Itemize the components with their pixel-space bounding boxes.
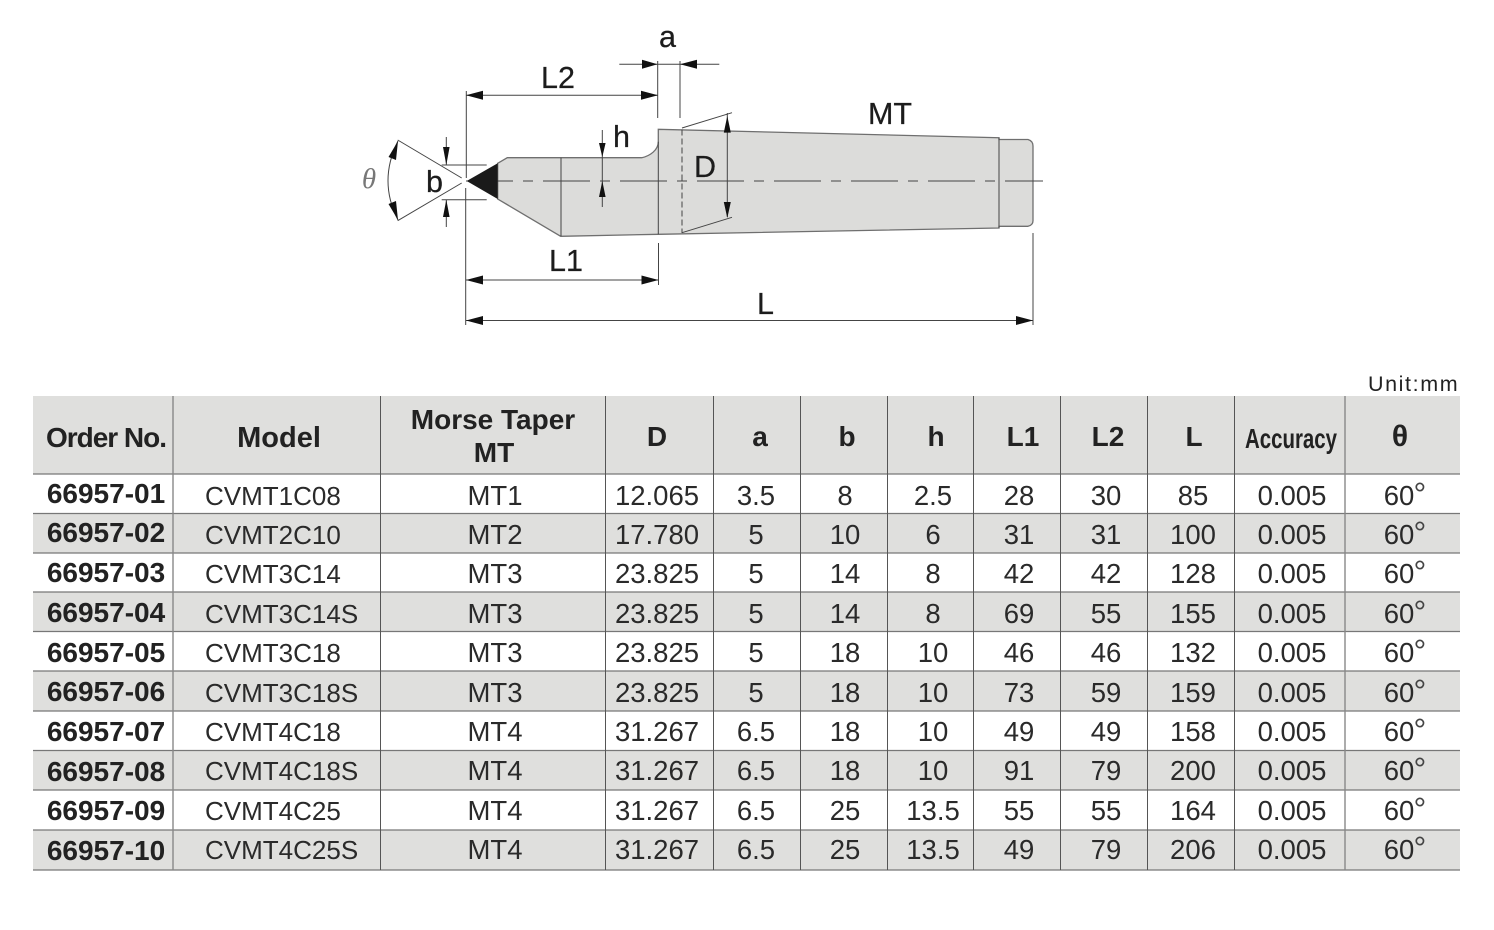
row 66957-01: 12.065 xyxy=(615,480,699,511)
dimension a: a xyxy=(659,20,676,54)
row 66957-06: 159 xyxy=(1170,677,1216,708)
row 66957-04 xyxy=(47,594,1426,630)
row 66957-07: CVMT4C18 xyxy=(205,717,341,747)
dimension a xyxy=(619,20,719,118)
row 66957-08: 79 xyxy=(1091,755,1121,786)
row 66957-04: 55 xyxy=(1091,598,1121,629)
angle theta: θ xyxy=(362,163,376,195)
row 66957-03: 42 xyxy=(1091,558,1121,589)
table header: L xyxy=(1185,421,1203,452)
row 66957-06: MT3 xyxy=(468,677,522,708)
row 66957-05: 5 xyxy=(748,637,764,668)
section lines xyxy=(561,138,999,236)
row 66957-08: 18 xyxy=(830,755,860,786)
row 66957-05: ° xyxy=(1414,633,1426,669)
row 66957-10: 79 xyxy=(1091,834,1121,865)
row 66957-08: 10 xyxy=(918,755,948,786)
row 66957-10: 13.5 xyxy=(906,834,960,865)
row 66957-04: 5 xyxy=(748,598,764,629)
row 66957-08: 66957-08 xyxy=(47,756,165,787)
table header xyxy=(46,404,1408,468)
row 66957-01 xyxy=(47,476,1426,512)
row 66957-01: ° xyxy=(1414,476,1426,512)
row 66957-06: 73 xyxy=(1004,677,1034,708)
row 66957-02: 17.780 xyxy=(615,519,699,550)
row 66957-03: MT3 xyxy=(468,558,522,589)
row 66957-02: 5 xyxy=(748,519,764,550)
row 66957-09: 31.267 xyxy=(615,795,699,826)
row 66957-05: CVMT3C18 xyxy=(205,638,341,668)
row 66957-10: 49 xyxy=(1004,834,1034,865)
specifications table xyxy=(33,396,1460,870)
row 66957-06: 66957-06 xyxy=(47,676,165,707)
row 66957-03: 128 xyxy=(1170,558,1216,589)
row 66957-08: 200 xyxy=(1170,755,1216,786)
row 66957-01: 30 xyxy=(1091,480,1121,511)
row 66957-08: MT4 xyxy=(468,755,522,786)
row 66957-09: 0.005 xyxy=(1258,795,1326,826)
row 66957-07: 10 xyxy=(918,716,948,747)
dimension b xyxy=(426,137,487,227)
row 66957-07: 49 xyxy=(1091,716,1121,747)
row 66957-09: 55 xyxy=(1091,795,1121,826)
row 66957-02: ° xyxy=(1414,515,1426,551)
row 66957-09: MT4 xyxy=(468,795,522,826)
row 66957-04: 8 xyxy=(925,598,941,629)
row 66957-02: 100 xyxy=(1170,519,1216,550)
row 66957-03: 42 xyxy=(1004,558,1034,589)
row 66957-06: 5 xyxy=(748,677,764,708)
row 66957-01: 8 xyxy=(837,480,853,511)
row 66957-09: 60 xyxy=(1384,795,1414,826)
table header: Model xyxy=(237,422,321,454)
row 66957-07: 49 xyxy=(1004,716,1034,747)
row 66957-06: CVMT3C18S xyxy=(205,678,358,708)
carbide tip xyxy=(467,163,498,199)
row 66957-08: 31.267 xyxy=(615,755,699,786)
row 66957-07: 158 xyxy=(1170,716,1216,747)
row 66957-02: 6 xyxy=(925,519,941,550)
unit note: Unit:mm xyxy=(1368,372,1459,396)
row 66957-10: 0.005 xyxy=(1258,834,1326,865)
dimension L1: L1 xyxy=(549,244,583,278)
row 66957-09: 13.5 xyxy=(906,795,960,826)
row 66957-10 xyxy=(47,830,1426,866)
row 66957-04: 155 xyxy=(1170,598,1216,629)
row 66957-02 xyxy=(47,515,1426,551)
row 66957-06: 59 xyxy=(1091,677,1121,708)
row 66957-09: 66957-09 xyxy=(47,795,165,826)
row 66957-04: 23.825 xyxy=(615,598,699,629)
row 66957-05: 0.005 xyxy=(1258,637,1326,668)
row 66957-03: 14 xyxy=(830,558,860,589)
row 66957-05: 66957-05 xyxy=(47,637,165,668)
row 66957-05: 60 xyxy=(1384,637,1414,668)
row 66957-07: MT4 xyxy=(468,716,522,747)
row 66957-05: 132 xyxy=(1170,637,1216,668)
dimension L1 xyxy=(466,243,658,285)
row 66957-10: 60 xyxy=(1384,834,1414,865)
table header: a xyxy=(752,421,768,452)
row 66957-02: 0.005 xyxy=(1258,519,1326,550)
row 66957-02: 66957-02 xyxy=(47,517,165,548)
dimension h xyxy=(599,120,630,207)
row 66957-08: CVMT4C18S xyxy=(205,756,358,786)
row 66957-01: 60 xyxy=(1384,480,1414,511)
centre body outline xyxy=(498,129,1033,236)
row 66957-08: 0.005 xyxy=(1258,755,1326,786)
table header: L2 xyxy=(1092,421,1124,452)
row 66957-01: 85 xyxy=(1178,480,1208,511)
row 66957-02: 60 xyxy=(1384,519,1414,550)
gauge plane dashed line xyxy=(681,130,683,233)
row 66957-07: 18 xyxy=(830,716,860,747)
dimension L: L xyxy=(757,287,774,321)
row 66957-05 xyxy=(47,633,1426,669)
row 66957-05: 18 xyxy=(830,637,860,668)
row 66957-06: 18 xyxy=(830,677,860,708)
row 66957-10: 6.5 xyxy=(737,834,775,865)
row 66957-03: CVMT3C14 xyxy=(205,559,341,589)
row 66957-03: 5 xyxy=(748,558,764,589)
row 66957-09: ° xyxy=(1414,791,1426,827)
row 66957-04: CVMT3C14S xyxy=(205,599,358,629)
table header: Morse Taper xyxy=(411,404,575,435)
row 66957-02: MT2 xyxy=(468,519,522,550)
table header: D xyxy=(647,421,667,452)
row 66957-01: 66957-01 xyxy=(47,478,165,509)
row 66957-04: ° xyxy=(1414,594,1426,630)
table header: MT xyxy=(474,437,514,468)
angle theta xyxy=(362,140,462,221)
row 66957-07: 31.267 xyxy=(615,716,699,747)
row 66957-07: 66957-07 xyxy=(47,716,165,747)
row 66957-01: 0.005 xyxy=(1258,480,1326,511)
row 66957-01: 2.5 xyxy=(914,480,952,511)
technical drawing: morse taper centre xyxy=(362,20,1043,325)
row 66957-07 xyxy=(47,712,1426,748)
row 66957-10: CVMT4C25S xyxy=(205,835,358,865)
row 66957-03: 23.825 xyxy=(615,558,699,589)
row 66957-05: MT3 xyxy=(468,637,522,668)
row 66957-06: 23.825 xyxy=(615,677,699,708)
row 66957-03: 8 xyxy=(925,558,941,589)
row 66957-07: ° xyxy=(1414,712,1426,748)
row 66957-10: 31.267 xyxy=(615,834,699,865)
row 66957-05: 10 xyxy=(918,637,948,668)
row 66957-07: 60 xyxy=(1384,716,1414,747)
row 66957-07: 0.005 xyxy=(1258,716,1326,747)
row 66957-09: CVMT4C25 xyxy=(205,796,341,826)
row 66957-04: MT3 xyxy=(468,598,522,629)
row 66957-05: 46 xyxy=(1004,637,1034,668)
row 66957-09 xyxy=(47,791,1426,827)
table header: b xyxy=(838,421,856,452)
row 66957-04: 0.005 xyxy=(1258,598,1326,629)
row 66957-10: 66957-10 xyxy=(47,835,165,866)
table header: L1 xyxy=(1007,421,1039,452)
row 66957-01: CVMT1C08 xyxy=(205,481,341,511)
row 66957-07: 6.5 xyxy=(737,716,775,747)
dimension D: D xyxy=(694,150,716,184)
dimension b: b xyxy=(426,165,443,199)
dimension D xyxy=(682,113,732,233)
table header: Accuracy xyxy=(1245,423,1337,454)
row 66957-10: ° xyxy=(1414,830,1426,866)
dimension L2: L2 xyxy=(541,61,575,95)
row 66957-09: 6.5 xyxy=(737,795,775,826)
dimension L2 xyxy=(466,61,658,178)
row 66957-06: ° xyxy=(1414,673,1426,709)
row 66957-08: 60 xyxy=(1384,755,1414,786)
row 66957-05: 23.825 xyxy=(615,637,699,668)
row 66957-10: 206 xyxy=(1170,834,1216,865)
row 66957-06: 0.005 xyxy=(1258,677,1326,708)
row 66957-03: 60 xyxy=(1384,558,1414,589)
row 66957-09: 25 xyxy=(830,795,860,826)
row 66957-01: 28 xyxy=(1004,480,1034,511)
dimension h: h xyxy=(613,120,630,154)
row 66957-04: 60 xyxy=(1384,598,1414,629)
row 66957-02: CVMT2C10 xyxy=(205,520,341,550)
row 66957-08: ° xyxy=(1414,751,1426,787)
centre line xyxy=(466,180,1043,182)
row 66957-08 xyxy=(47,751,1426,787)
row 66957-06: 10 xyxy=(918,677,948,708)
table grid xyxy=(33,396,1460,870)
row 66957-03 xyxy=(47,554,1426,590)
row 66957-01: 3.5 xyxy=(737,480,775,511)
row 66957-04: 14 xyxy=(830,598,860,629)
dimension L xyxy=(466,188,1033,325)
row 66957-03: 0.005 xyxy=(1258,558,1326,589)
table header: θ xyxy=(1392,420,1408,453)
table header: Order No. xyxy=(46,422,167,453)
row 66957-09: 55 xyxy=(1004,795,1034,826)
row 66957-02: 31 xyxy=(1091,519,1121,550)
row 66957-04: 66957-04 xyxy=(47,597,166,628)
row 66957-06 xyxy=(47,673,1426,709)
row 66957-10: 25 xyxy=(830,834,860,865)
table shading xyxy=(33,396,1460,870)
row 66957-09: 164 xyxy=(1170,795,1216,826)
row 66957-06: 60 xyxy=(1384,677,1414,708)
row 66957-04: 69 xyxy=(1004,598,1034,629)
label MT: MT xyxy=(868,97,912,131)
table header: h xyxy=(927,421,945,452)
row 66957-03: 66957-03 xyxy=(47,557,165,588)
row 66957-01: MT1 xyxy=(468,480,522,511)
row 66957-05: 46 xyxy=(1091,637,1121,668)
row 66957-02: 10 xyxy=(830,519,860,550)
row 66957-02: 31 xyxy=(1004,519,1034,550)
row 66957-08: 91 xyxy=(1004,755,1034,786)
row 66957-03: ° xyxy=(1414,554,1426,590)
row 66957-08: 6.5 xyxy=(737,755,775,786)
row 66957-10: MT4 xyxy=(468,834,522,865)
